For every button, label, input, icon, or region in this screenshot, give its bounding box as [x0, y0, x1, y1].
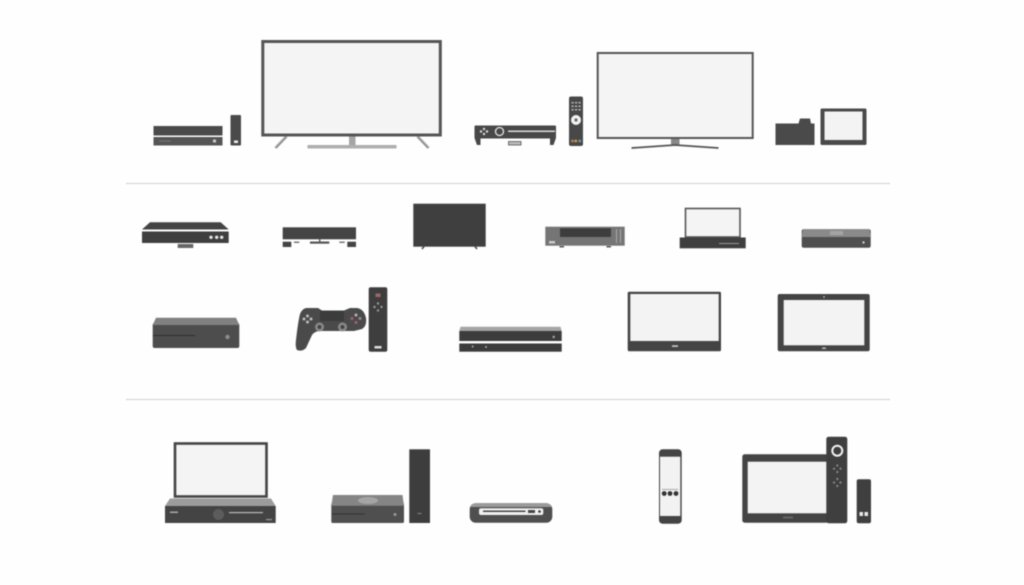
icon: camera-shaped folder	[776, 118, 814, 145]
icon: stacked receiver	[459, 327, 562, 352]
icon: dark television	[413, 204, 486, 249]
icon: small tower, row 1	[230, 115, 241, 146]
icon: set-top box, row 1	[154, 126, 222, 146]
icon: flat grey box	[802, 229, 871, 248]
icon: tablet, row 4	[742, 454, 828, 523]
icon: tall tower	[409, 449, 430, 523]
icon: small stick remote	[857, 479, 871, 523]
icon: media player with legs	[474, 126, 556, 145]
icon: medium television	[598, 53, 753, 148]
icon: monitor with chin	[628, 292, 721, 351]
icon: tablet, row 3	[778, 294, 870, 351]
icon: disc player	[470, 503, 552, 523]
icon: smartphone	[659, 449, 682, 524]
icon: small tablet	[820, 108, 866, 145]
icon: remote with ring	[826, 437, 847, 523]
icon: laptop on dock, row 4	[165, 444, 276, 523]
icon: square media box	[331, 495, 404, 523]
icon: tv remote	[569, 96, 583, 146]
icon: laptop on dock, row 2	[680, 208, 746, 248]
icon: slim remote, row 3	[369, 287, 387, 352]
icon: large television	[263, 42, 440, 148]
icon: game controller	[296, 308, 366, 351]
icon: low console with feet	[283, 227, 356, 247]
icon: set-top box, row 2	[142, 222, 229, 248]
icon: game console	[153, 318, 239, 348]
icon: grey dvd recorder	[545, 227, 625, 248]
